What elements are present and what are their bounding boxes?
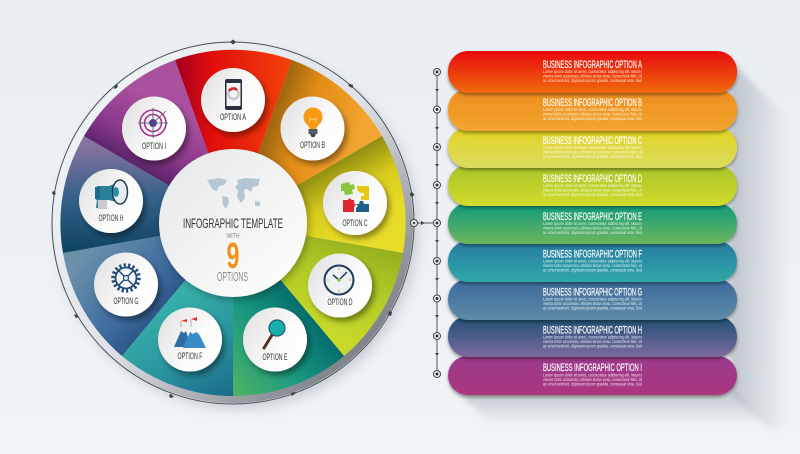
bar C: BUSINESS INFOGRAPHIC OPTION C (543, 135, 642, 147)
chip: option H (79, 169, 143, 233)
icon: gear (113, 265, 139, 291)
bar I: Lorem ipsum dolor sit amet, consectetur adipiscing elit. Mauris (543, 372, 642, 378)
wedge I (84, 60, 233, 223)
wedge C (233, 136, 406, 253)
label: OPTION I (142, 141, 166, 151)
label: OPTION F (178, 351, 203, 361)
label: OPTION A (220, 112, 246, 122)
bar F: Lorem ipsum dolor sit amet, consectetur adipiscing elit. Mauris (543, 258, 642, 264)
bar I: viverra tortor accumsan, ultricies lectus vivac, consectetur felis. Ut (543, 377, 643, 382)
bar I (448, 356, 737, 395)
chip: option E (243, 308, 307, 372)
bar A: BUSINESS INFOGRAPHIC OPTION A (543, 59, 642, 71)
wedge A (175, 50, 292, 223)
bar F (448, 241, 737, 282)
chip: option B (280, 96, 344, 160)
bar C: ac urna hendrerit, dignissim ipsum gravida, consequat urna. Sed (543, 154, 642, 159)
bar H: viverra tortor accumsan, ultricies lectus vivac, consectetur felis. Ut (543, 339, 643, 344)
icon: mountains with flags (174, 317, 206, 348)
heading: infographic template: INFOGRAPHIC TEMPLATE (183, 215, 283, 231)
chip: option A (201, 68, 265, 132)
bar B (448, 89, 737, 131)
bar A: viverra tortor accumsan, ultricies lectus vivac, consectetur felis. Ut (543, 74, 643, 78)
bar D: ac urna hendrerit, dignissim ipsum gravida, consequat urna. Sed (543, 192, 642, 197)
bar H (448, 316, 737, 357)
bar D: Lorem ipsum dolor sit amet, consectetur adipiscing elit. Mauris (543, 183, 642, 188)
center hub (159, 149, 307, 297)
bar B: viverra tortor accumsan, ultricies lectus vivac, consectetur felis. Ut (543, 112, 643, 116)
bar A (448, 51, 737, 93)
number: 9: 9 (226, 235, 240, 276)
label: OPTION H (98, 213, 124, 223)
chip: option D (308, 254, 372, 318)
icon: magnifier (264, 320, 285, 348)
bar G: Lorem ipsum dolor sit amet, consectetur adipiscing elit. Mauris (543, 296, 642, 302)
bar B: Lorem ipsum dolor sit amet, consectetur adipiscing elit. Mauris (543, 107, 642, 112)
bar G: ac urna hendrerit, dignissim ipsum gravida, consequat urna. Sed (543, 306, 642, 310)
bar B: BUSINESS INFOGRAPHIC OPTION B (543, 97, 642, 109)
long shadow of bars (458, 58, 797, 428)
chip: option F (158, 308, 222, 372)
label: OPTION D (328, 297, 353, 307)
bar G: viverra tortor accumsan, ultricies lectus vivac, consectetur felis. Ut (543, 301, 643, 306)
chip: option C (323, 171, 387, 235)
icon: puzzle (341, 182, 369, 212)
wedge B (233, 60, 382, 223)
bar F: BUSINESS INFOGRAPHIC OPTION F (543, 248, 642, 260)
bar D (448, 165, 737, 206)
connector arrow (410, 220, 437, 226)
label: OPTION B (300, 140, 325, 150)
bar H: Lorem ipsum dolor sit amet, consectetur adipiscing elit. Mauris (543, 334, 642, 340)
label: OPTION G (114, 296, 138, 306)
bar C: Lorem ipsum dolor sit amet, consectetur adipiscing elit. Mauris (543, 145, 642, 150)
bar G: BUSINESS INFOGRAPHIC OPTION G (543, 286, 642, 298)
bar A: Lorem ipsum dolor sit amet, consectetur adipiscing elit. Mauris (543, 69, 642, 74)
bar F: ac urna hendrerit, dignissim ipsum gravida, consequat urna. Sed (543, 268, 642, 272)
panel: option bars (448, 51, 737, 395)
outer ring line with arrows (52, 40, 414, 404)
label: OPTION E (262, 352, 288, 362)
bar E: BUSINESS INFOGRAPHIC OPTION E (543, 211, 642, 223)
wheel soft shadow (58, 49, 418, 409)
chip: option I (122, 96, 186, 160)
chip: option G (94, 252, 158, 316)
bar E (448, 203, 737, 244)
panel: wheel wedges (60, 50, 406, 396)
bar H: ac urna hendrerit, dignissim ipsum gravida, consequat urna. Sed (543, 344, 642, 348)
label: OPTION C (342, 218, 368, 228)
icon: light bulb (304, 108, 322, 137)
wedge H (60, 136, 233, 253)
bar B: ac urna hendrerit, dignissim ipsum gravida, consequat urna. Sed (543, 116, 642, 121)
bar C: viverra tortor accumsan, ultricies lectus vivac, consectetur felis. Ut (543, 150, 643, 154)
bar F: viverra tortor accumsan, ultricies lectus vivac, consectetur felis. Ut (543, 263, 643, 268)
bar A: ac urna hendrerit, dignissim ipsum gravida, consequat urna. Sed (543, 78, 642, 83)
bar E: Lorem ipsum dolor sit amet, consectetur adipiscing elit. Mauris (543, 221, 642, 226)
icon: smartphone (225, 79, 242, 110)
wedge G (63, 223, 233, 356)
bar I: BUSINESS INFOGRAPHIC OPTION I (543, 362, 642, 374)
icon: world map (207, 178, 260, 209)
bar D: viverra tortor accumsan, ultricies lectus vivac, consectetur felis. Ut (543, 188, 643, 192)
bar D: BUSINESS INFOGRAPHIC OPTION D (543, 173, 642, 185)
bar C (448, 127, 737, 168)
wedge E (233, 223, 344, 396)
icon: clock (324, 266, 354, 294)
bar E: ac urna hendrerit, dignissim ipsum gravida, consequat urna. Sed (543, 230, 642, 235)
text: with: WITH (226, 231, 240, 240)
timeline with nodes (434, 68, 440, 378)
bar H: BUSINESS INFOGRAPHIC OPTION H (543, 324, 642, 336)
text: options: OPTIONS (217, 270, 248, 284)
outer ring (53, 43, 413, 403)
wedge F (122, 223, 233, 396)
icon: target (138, 108, 168, 138)
bar I: ac urna hendrerit, dignissim ipsum gravida, consequat urna. Sed (543, 382, 642, 386)
wedge D (233, 223, 403, 356)
bar G (448, 279, 737, 320)
bar E: viverra tortor accumsan, ultricies lectus vivac, consectetur felis. Ut (543, 226, 643, 230)
icon: megaphone (95, 180, 128, 209)
